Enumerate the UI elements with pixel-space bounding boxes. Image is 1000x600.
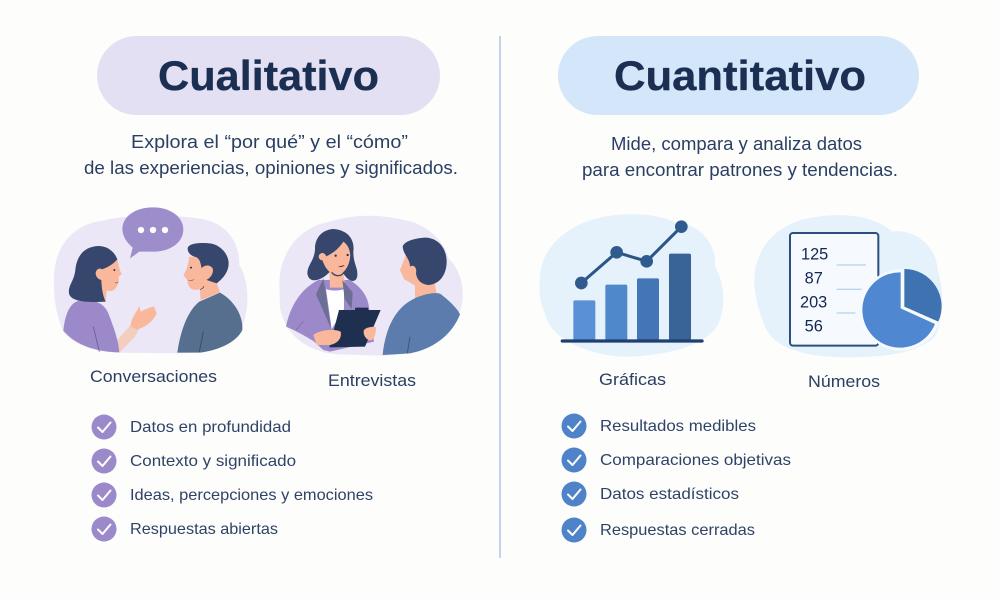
text block: descripción cualitativo [84,132,458,178]
item: Comparaciones objetivas: Comparaciones objetivas [600,452,791,469]
item: Datos en profundidad: Datos en profundidad [130,419,291,436]
label: Conversaciones: Conversaciones [90,368,217,386]
trend line [575,220,688,289]
document: 56 [805,318,823,336]
bars [573,254,691,340]
item: Ideas, percepciones y emociones [92,482,373,508]
man [177,243,242,353]
panel: cuantitativo [540,36,942,542]
item: Respuestas cerradas [562,518,755,542]
item: Datos estadísticos: Datos estadísticos [600,486,739,503]
text block: descripción cualitativo: de las experiencias, opiniones y significados. [84,158,458,178]
woman [63,246,157,353]
document: 87 [805,270,823,288]
item: Ideas, percepciones y emociones: Ideas, percepciones y emociones [130,487,373,504]
document [790,233,878,346]
icon: gráfica de barras [540,214,723,357]
item: Contexto y significado: Contexto y significado [130,453,296,470]
list: características cuantitativo [562,414,791,542]
item: Resultados medibles [562,414,756,438]
pie chart [860,269,942,351]
item: Resultados medibles: Resultados medibles [600,418,756,435]
heading: Cualitativo [97,36,440,115]
text block: descripción cuantitativo [582,134,898,180]
icon: números y gráfico circular [754,215,942,357]
heading: Cuantitativo: Cuantitativo [614,52,866,99]
document: 125 [801,245,828,263]
icon: conversaciones [54,207,247,353]
text block: descripción cuantitativo: para encontrar patrones y tendencias. [582,160,898,180]
interviewee [383,238,460,355]
item: Datos estadísticos [562,482,739,506]
panel: cualitativo [54,36,463,542]
document: 203 [800,294,827,312]
text block: descripción cuantitativo: Mide, compara y analiza datos [611,134,862,154]
heading: Cualitativo: Cualitativo [158,52,379,99]
item: Datos en profundidad [92,414,291,440]
list: características cualitativo [92,414,373,542]
label: Números: Números [808,373,880,391]
item: Comparaciones objetivas [562,448,791,472]
icon: entrevistas [279,216,463,356]
label: Gráficas: Gráficas [599,371,666,389]
item: Respuestas abiertas: Respuestas abiertas [130,521,278,538]
label: Entrevistas: Entrevistas [328,372,416,390]
interviewer [286,229,381,352]
item: Respuestas abiertas [92,516,278,542]
item: Respuestas cerradas: Respuestas cerradas [600,522,755,539]
heading: Cuantitativo [558,36,919,115]
item: Contexto y significado [92,448,296,474]
text block: descripción cualitativo: Explora el “por qué” y el “cómo” [131,132,408,152]
speech bubble [122,207,183,258]
